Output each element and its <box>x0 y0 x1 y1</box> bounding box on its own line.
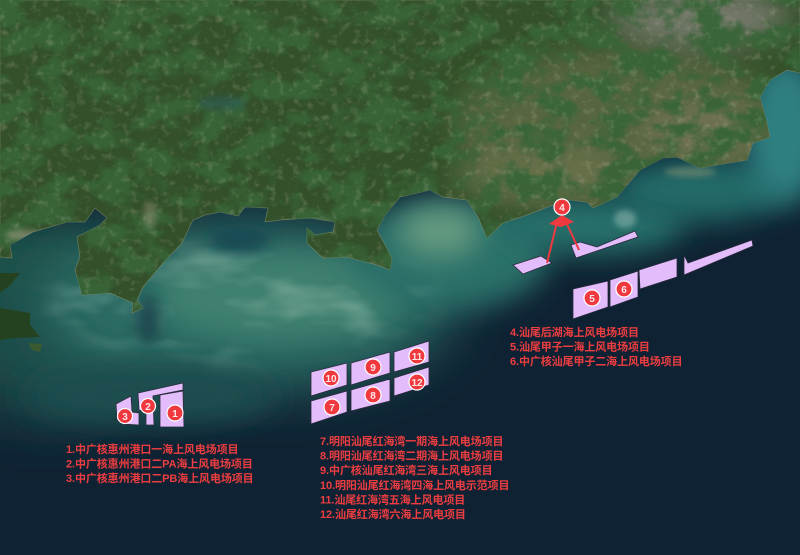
arrow: west area to marker 4 <box>547 222 557 263</box>
marker 6 <box>616 281 632 297</box>
marker 2: 2 <box>145 402 151 413</box>
marker 5 <box>584 290 600 306</box>
marker 11: 11 <box>412 352 423 363</box>
area 11 <box>394 341 429 372</box>
area 3 outline <box>116 396 139 425</box>
legend: Honghai Bay projects: 10.明阳汕尾红海湾四海上风电示范项目 <box>320 478 509 492</box>
legend: Honghai Bay projects: 11.汕尾红海湾五海上风电项目 <box>320 492 465 506</box>
background: land with mountains <box>0 0 800 352</box>
area 2 outline <box>138 383 183 425</box>
marker 8: 8 <box>370 391 376 402</box>
group A: Huizhou wind farm areas <box>116 383 184 427</box>
area 10 <box>311 363 347 396</box>
area 6 <box>610 271 638 307</box>
marker 4: 4 <box>559 203 565 214</box>
legend: Huizhou projects <box>66 442 254 485</box>
marker 4 <box>554 199 570 215</box>
marker 10: 10 <box>325 374 337 385</box>
legend: Honghai Bay projects: 12.汕尾红海湾六海上风电项目 <box>320 507 466 521</box>
area 4 west <box>513 256 552 274</box>
area 5 <box>573 281 608 319</box>
marker 3: 3 <box>122 412 128 423</box>
group B: Honghai Bay wind farm areas <box>311 341 429 424</box>
arrowhead <box>549 215 574 227</box>
arrow: east area to marker 4 <box>566 222 579 250</box>
legend: Huizhou projects: 1.中广核惠州港口一海上风电场项目 <box>66 442 238 456</box>
marker 1: 1 <box>172 409 178 420</box>
legend: Honghai Bay projects: 8.明阳汕尾红海湾二期海上风电场项目 <box>320 448 503 462</box>
group C: Shanwei Jiazi wind farm areas <box>513 199 753 319</box>
legend: Huizhou projects: 3.中广核惠州港口二PB海上风电场项目 <box>66 471 254 485</box>
legend: Shanwei Jiazi projects: 4.汕尾后湖海上风电场项目 <box>510 325 639 339</box>
area 9 <box>351 352 390 385</box>
legend: Shanwei Jiazi projects <box>510 325 682 368</box>
far east area <box>684 240 753 275</box>
area 4 east <box>571 231 638 258</box>
marker 12: 12 <box>411 378 423 389</box>
legend: Shanwei Jiazi projects: 6.中广核汕尾甲子二海上风电场项目 <box>510 354 682 368</box>
marker 7: 7 <box>329 403 335 414</box>
area 1 outline <box>160 391 184 427</box>
area 8 <box>351 379 390 411</box>
background: sea <box>0 70 800 445</box>
area 12 <box>394 367 429 396</box>
islands <box>0 273 42 352</box>
legend: Honghai Bay projects: 7.明阳汕尾红海湾一期海上风电场项目 <box>320 434 503 448</box>
marker 9: 9 <box>370 363 376 374</box>
legend: Honghai Bay projects: 9.中广核汕尾红海湾三海上风电项目 <box>320 463 492 477</box>
unlabelled area east of 6 <box>639 258 677 289</box>
marker 6: 6 <box>621 285 627 296</box>
area 7 <box>311 391 347 424</box>
legend: Huizhou projects: 2.中广核惠州港口二PA海上风电场项目 <box>66 456 253 470</box>
legend: Honghai Bay projects <box>320 434 509 521</box>
marker 5: 5 <box>589 294 595 305</box>
legend: Shanwei Jiazi projects: 5.汕尾甲子一海上风电场项目 <box>510 340 650 354</box>
